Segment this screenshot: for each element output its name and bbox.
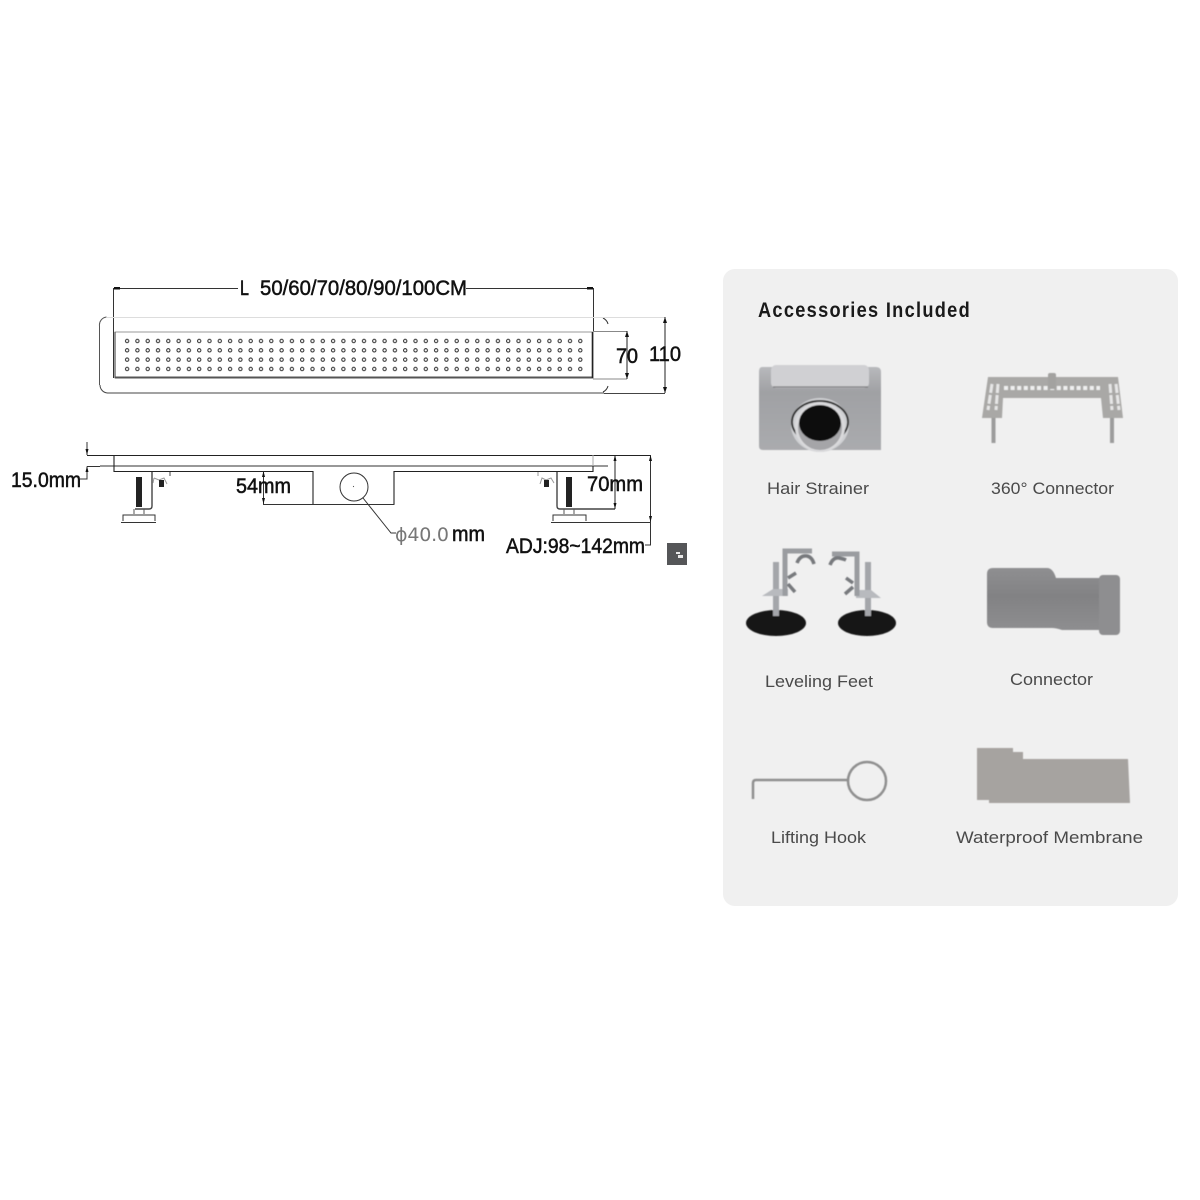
heading: Accessories Included (758, 299, 971, 322)
length dimension: 50/60/70/80/90/100CM (260, 277, 467, 300)
15.0mm dimension: 15.0mm (11, 469, 81, 492)
15.0mm dimension (11, 442, 100, 492)
40mm outlet with leader: mm (452, 523, 485, 546)
drain outer channel outline (99, 317, 665, 393)
panel: accessories included (723, 269, 1178, 906)
width dimension 70: 70 (616, 345, 638, 368)
label: Connector (1010, 670, 1093, 689)
label: 360° Connector (991, 479, 1114, 498)
accessory: waterproof membrane (956, 748, 1143, 847)
accessory: hair strainer (759, 365, 881, 498)
right leveling foot (538, 472, 615, 522)
drain body profile (87, 455, 650, 504)
width dimension 70 (593, 331, 638, 379)
accessory: leveling feet (746, 551, 896, 691)
accessory: 360 connector (982, 373, 1123, 498)
label: Waterproof Membrane (956, 828, 1143, 847)
adjustable height dimension: ADJ:98~142mm (506, 535, 645, 558)
width dimension 110: 110 (649, 343, 681, 366)
40mm outlet with leader: ϕ40.0 (395, 524, 449, 546)
width dimension 110 (604, 317, 681, 394)
left leveling foot (121, 472, 170, 522)
accessory: lifting hook (753, 762, 886, 847)
adjustable height dimension (506, 455, 652, 558)
length dimension (114, 277, 594, 378)
perforated grate cover (115, 332, 593, 378)
icon: small grey badge (667, 543, 687, 565)
70mm dimension: 70mm (587, 473, 643, 496)
top view drawing (99, 277, 681, 394)
40mm outlet with leader (340, 473, 485, 546)
accessory: connector pipe (987, 568, 1120, 689)
length dimension: L (240, 277, 249, 300)
label: Lifting Hook (771, 828, 867, 847)
70mm dimension (587, 455, 643, 509)
side view drawing (11, 442, 652, 558)
label: Leveling Feet (765, 672, 873, 691)
54mm dimension: 54mm (236, 475, 291, 498)
54mm dimension (236, 471, 291, 504)
label: Hair Strainer (767, 479, 869, 498)
